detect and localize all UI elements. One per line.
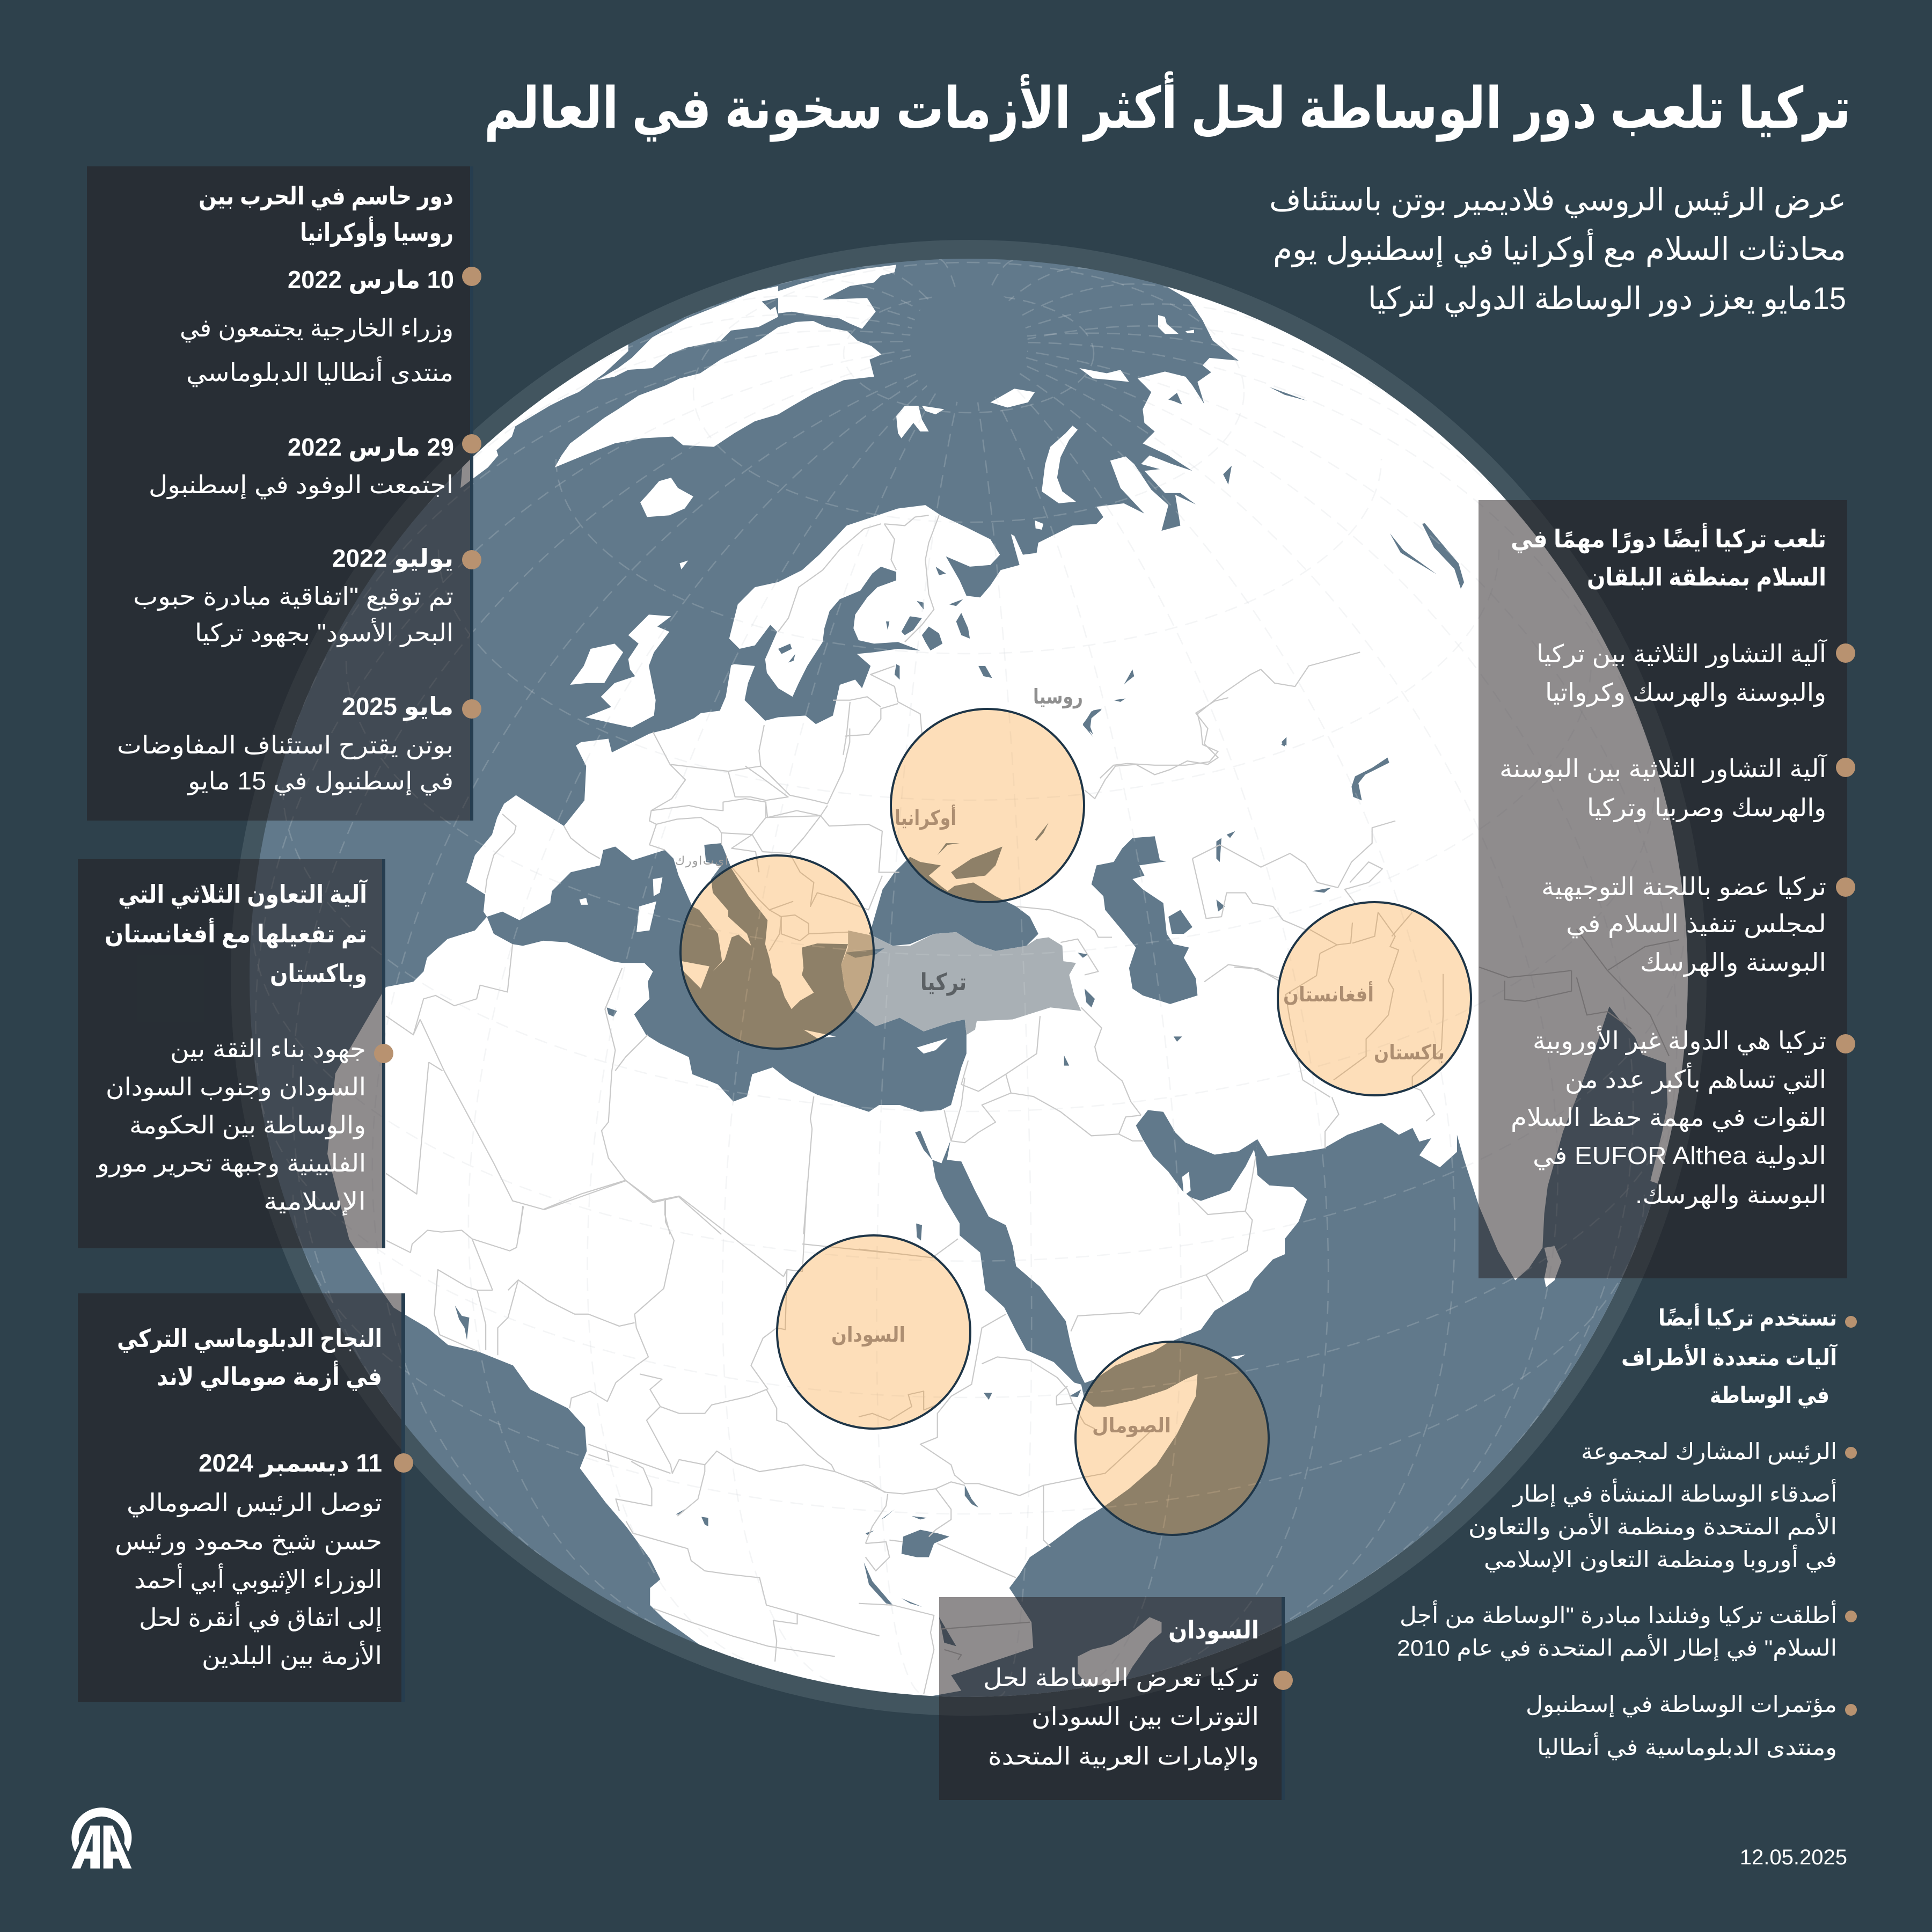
panel heading: تلعب تركيا أيضًا دورًا مهمًا في bbox=[1511, 523, 1826, 553]
timeline entry: May 2025: في إسطنبول في 15 مايو bbox=[187, 767, 453, 796]
graticule bbox=[252, 259, 1685, 1696]
panel heading: في أزمة صومالي لاند bbox=[157, 1360, 382, 1391]
panel heading: السلام بمنطقة البلقان bbox=[1587, 563, 1826, 591]
panel edge bbox=[382, 859, 385, 1248]
lakes: Siberia bbox=[1422, 523, 1464, 589]
list text 1: أصدقاء الوساطة المنشأة في إطار bbox=[1512, 1478, 1837, 1507]
panel heading: روسيا وأوكرانيا bbox=[300, 216, 453, 247]
bullet 2 bbox=[1836, 758, 1855, 777]
subtitle: 15مايو يعزز دور الوساطة الدولي لتركيا bbox=[1368, 281, 1846, 317]
lakes: Central Asia bbox=[1390, 533, 1437, 574]
bullet text 2: والهرسك وصربيا وتركيا bbox=[1587, 794, 1826, 823]
bullet text 4: الدولية EUFOR Althea في bbox=[1533, 1141, 1826, 1170]
section bullet bbox=[1845, 1316, 1857, 1328]
country borders: South Asia bbox=[1234, 912, 1679, 1148]
land: northern Eurasia bbox=[720, 265, 1678, 857]
panel body text: والإمارات العربية المتحدة bbox=[988, 1742, 1259, 1771]
country borders: West and Central Africa bbox=[386, 1181, 885, 1662]
bullet text 2 bbox=[1499, 754, 1827, 823]
panel: Balkans bbox=[1479, 500, 1855, 1278]
panel body text: إلى اتفاق في أنقرة لحل bbox=[139, 1601, 382, 1633]
land: central and southern Africa bbox=[349, 1238, 1376, 1697]
highlight circle: Balkans bbox=[680, 855, 874, 1049]
panel body text: الأزمة بين البلدين bbox=[202, 1640, 382, 1671]
timeline entry: July 2022: يوليو 2022 bbox=[332, 544, 453, 573]
panel heading bbox=[1511, 523, 1826, 591]
seas and lakes: Black Sea, Caspian, Persian Gulf bbox=[869, 709, 1389, 1201]
panel body text: التوترات بين السودان bbox=[1031, 1702, 1259, 1731]
timeline dot 2 bbox=[462, 434, 481, 453]
panel background bbox=[1479, 500, 1847, 1278]
bullet 4 bbox=[1836, 1034, 1855, 1053]
panel body text bbox=[115, 1449, 382, 1671]
panel body text: الإسلامية bbox=[264, 1187, 366, 1216]
subtitle bbox=[1269, 182, 1846, 317]
map label: Somalia: الصومال bbox=[1092, 1415, 1171, 1437]
panel heading: آلية التعاون الثلاثي التي bbox=[118, 879, 368, 909]
country borders: Europe and North Africa bbox=[386, 725, 899, 1234]
map label: Sudan: السودان bbox=[831, 1324, 905, 1346]
panel background bbox=[939, 1597, 1282, 1800]
list text 2 bbox=[1397, 1600, 1837, 1662]
list text 3: ومنتدى الدبلوماسية في أنطاليا bbox=[1537, 1732, 1837, 1761]
land: western Europe and North Africa bbox=[327, 711, 1231, 1239]
subtitle: محادثات السلام مع أوكرانيا في إسطنبول يوم bbox=[1273, 229, 1846, 268]
highlight circle: Afghanistan and Pakistan bbox=[1278, 902, 1471, 1095]
panel heading bbox=[199, 182, 453, 247]
bullet text 4: البوسنة والهرسك. bbox=[1635, 1181, 1826, 1210]
panel heading: تم تفعيلها مع أفغانستان bbox=[105, 918, 367, 948]
bullet text 4 bbox=[1511, 1025, 1826, 1210]
panel body text bbox=[96, 1035, 366, 1216]
bullet text 4: القوات في مهمة حفظ السلام bbox=[1511, 1103, 1826, 1132]
panel background bbox=[87, 166, 470, 821]
panel heading: السودان bbox=[1168, 1616, 1259, 1644]
country borders: northern Eurasia bbox=[778, 515, 1360, 778]
land: Asia fill bbox=[1181, 805, 1688, 1665]
bullet text 4: التي تساهم بأكبر عدد من bbox=[1565, 1062, 1826, 1094]
timeline entry: 29 March 2022: 29 مارس 2022 bbox=[288, 433, 454, 462]
timeline entry: July 2022 bbox=[133, 544, 453, 648]
timeline entry: 29 March 2022 bbox=[149, 433, 454, 500]
country borders: Middle East and Central Asia bbox=[944, 698, 1395, 1214]
panel body text: والوساطة بين الحكومة bbox=[129, 1111, 366, 1140]
timeline entry: 10 March 2022 bbox=[180, 266, 454, 387]
highlight circle: Ukraine bbox=[891, 709, 1084, 902]
timeline entry: May 2025 bbox=[117, 692, 453, 796]
map label: Turkey: تركيا bbox=[920, 969, 967, 996]
list bullet 2 bbox=[1845, 1611, 1857, 1622]
lakes: West Africa bbox=[455, 1306, 708, 1526]
map label: Russia: روسيا bbox=[1033, 686, 1083, 709]
islands: Mediterranean bbox=[579, 877, 948, 1053]
panel: Sudan bbox=[939, 1597, 1293, 1800]
highlight circle: Sudan bbox=[777, 1235, 970, 1429]
map label: Croatia: ا ي ت ا و ر ك bbox=[675, 854, 728, 867]
bullet text 3 bbox=[1541, 873, 1826, 977]
globe ocean disc bbox=[250, 259, 1688, 1697]
list text 2: السلام" في إطار الأمم المتحدة في عام 2010 bbox=[1397, 1634, 1837, 1662]
list text 3: مؤتمرات الوساطة في إسطنبول bbox=[1526, 1692, 1837, 1718]
island: Qatar bbox=[1182, 1172, 1191, 1196]
panel edge bbox=[401, 1293, 405, 1702]
highlight circle: Somalia bbox=[1075, 1342, 1269, 1535]
timeline dot 4 bbox=[462, 699, 481, 719]
bullet text 3: لمجلس تنفيذ السلام في bbox=[1566, 910, 1826, 939]
section heading: تستخدم تركيا أيضًا bbox=[1658, 1303, 1837, 1331]
map label: Afghanistan: أفغانستان bbox=[1283, 981, 1374, 1006]
panel body text: حسن شيخ محمود ورئيس bbox=[115, 1527, 382, 1556]
sea: Indian Ocean, Gulf of Aden, Arabian Sea, Bay of Bengal bbox=[924, 1006, 1748, 1831]
subtitle: عرض الرئيس الروسي فلاديمير بوتن باستئناف bbox=[1269, 182, 1846, 218]
panel background bbox=[78, 859, 382, 1248]
logo: AA bbox=[71, 1807, 131, 1869]
section: multilateral mechanisms bbox=[1397, 1303, 1857, 1761]
section heading: آليات متعددة الأطراف bbox=[1621, 1344, 1838, 1371]
bullet bbox=[394, 1453, 413, 1473]
timeline entry: 10 March 2022: 10 مارس 2022 bbox=[288, 266, 454, 294]
list text 3 bbox=[1526, 1692, 1837, 1761]
sea: Mediterranean, Adriatic and Aegean bbox=[487, 843, 967, 1112]
list text 1: الرئيس المشارك لمجموعة bbox=[1581, 1439, 1837, 1465]
panel edge bbox=[1282, 1597, 1285, 1800]
panel body text: توصل الرئيس الصومالي bbox=[127, 1489, 382, 1518]
timeline entry: July 2022: تم توقيع "اتفاقية مبادرة حبوب bbox=[133, 582, 453, 611]
section heading bbox=[1621, 1303, 1838, 1409]
timeline entry: 10 March 2022: منتدى أنطاليا الدبلوماسي bbox=[186, 356, 453, 387]
panel body text: 11 ديسمبر 2024 bbox=[199, 1449, 382, 1477]
list text 1: الأمم المتحدة ومنظمة الأمن والتعاون bbox=[1468, 1512, 1837, 1540]
panel body text: تركيا تعرض الوساطة لحل bbox=[983, 1664, 1259, 1693]
bullet bbox=[1274, 1671, 1293, 1690]
panel body text: الفلبينية وجبهة تحرير مورو bbox=[96, 1149, 366, 1178]
timeline entry: 29 March 2022: اجتمعت الوفود في إسطنبول bbox=[149, 471, 453, 500]
islands: Madagascar, Socotra, Sri Lanka bbox=[1078, 1246, 1561, 1697]
panel body text bbox=[983, 1664, 1259, 1771]
bullet text 2: آلية التشاور الثلاثية بين البوسنة bbox=[1499, 754, 1827, 784]
panel: trilateral mechanism with Afghanistan and Pakistan bbox=[78, 859, 393, 1248]
sea: Baltic and Skagerrak bbox=[728, 387, 1307, 747]
country highlight: Turkey bbox=[841, 931, 1081, 1035]
bullet text 3: البوسنة والهرسك bbox=[1640, 948, 1826, 977]
list bullet 1 bbox=[1845, 1447, 1857, 1459]
date: 12.05.2025 bbox=[1740, 1846, 1847, 1869]
map label: Ukraine: أوكرانيا bbox=[895, 804, 956, 830]
timeline entry: May 2025: بوتن يقترح استئناف المفاوضات bbox=[117, 731, 453, 760]
panel body text: السودان وجنوب السودان bbox=[106, 1073, 366, 1102]
timeline entry: May 2025: مايو 2025 bbox=[342, 692, 453, 721]
panel body text: الوزراء الإثيوبي أبي أحمد bbox=[134, 1563, 382, 1594]
panel heading: النجاح الدبلوماسي التركي bbox=[117, 1324, 382, 1353]
panel heading: دور حاسم في الحرب بين bbox=[199, 182, 453, 210]
timeline dot 3 bbox=[462, 550, 481, 569]
panel: Somaliland crisis bbox=[78, 1293, 413, 1702]
lakes: East Africa bbox=[864, 1224, 992, 1646]
bullet text 3: تركيا عضو باللجنة التوجيهية bbox=[1541, 873, 1826, 902]
section heading: في الوساطة bbox=[1710, 1382, 1829, 1409]
sea: Red Sea bbox=[915, 1131, 1086, 1397]
panel edge bbox=[470, 166, 473, 821]
timeline entry: July 2022: البحر الأسود" بجهود تركيا bbox=[195, 617, 453, 648]
list text 1: في أوروبا ومنظمة التعاون الإسلامي bbox=[1484, 1545, 1837, 1573]
timeline entry: 10 March 2022: وزراء الخارجية يجتمعون في bbox=[180, 314, 453, 343]
panel body text: جهود بناء الثقة بين bbox=[170, 1035, 366, 1064]
land: Canada, Greenland, Iceland, British Isles bbox=[460, 286, 882, 728]
list text 2: أطلقت تركيا وفنلندا مبادرة "الوساطة من أجل bbox=[1400, 1600, 1837, 1628]
globe outer ring bbox=[231, 240, 1707, 1716]
bullet bbox=[374, 1044, 393, 1063]
panel heading bbox=[117, 1324, 382, 1391]
bullet 3 bbox=[1836, 877, 1855, 897]
panel: Russia Ukraine war timeline bbox=[87, 166, 481, 821]
timeline dot 1 bbox=[462, 267, 481, 286]
panel background bbox=[78, 1293, 401, 1702]
globe map bbox=[231, 240, 1707, 1716]
bullet text 1: آلية التشاور الثلاثية بين تركيا bbox=[1536, 639, 1827, 669]
bullet text 1: والبوسنة والهرسك وكرواتيا bbox=[1545, 678, 1826, 707]
list text 1 bbox=[1468, 1439, 1837, 1573]
map label: Pakistan: باكستان bbox=[1374, 1042, 1445, 1064]
panel heading: وباكستان bbox=[270, 960, 367, 988]
panel heading bbox=[105, 879, 368, 988]
bullet 1 bbox=[1836, 643, 1855, 663]
bullet text 4: تركيا هي الدولة غير الأوروبية bbox=[1533, 1025, 1826, 1056]
list bullet 3 bbox=[1845, 1704, 1857, 1716]
country borders: East Africa and Arabia bbox=[859, 1211, 1252, 1694]
map geography bbox=[252, 241, 1825, 1831]
bullet text 1 bbox=[1536, 639, 1827, 707]
